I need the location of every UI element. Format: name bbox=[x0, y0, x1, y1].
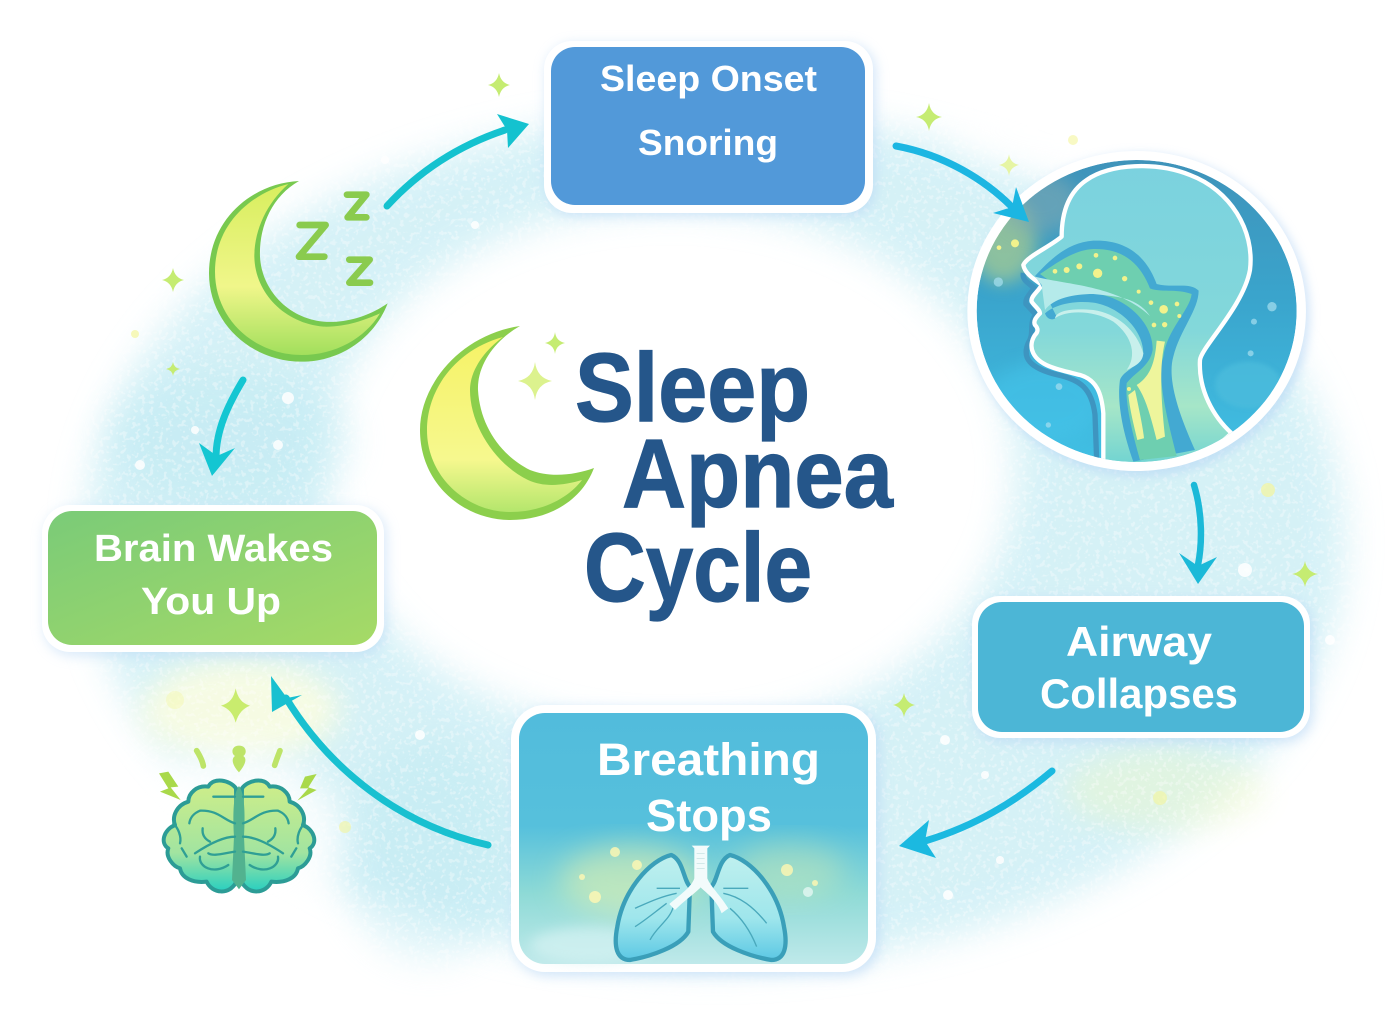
arrow: head to airway collapses bbox=[1179, 485, 1217, 584]
title block: moon and Sleep Apnea Cycle bbox=[420, 326, 894, 622]
icon: brain with alert bolts bbox=[159, 688, 317, 891]
step box: Sleep Onset / Snoring bbox=[544, 41, 876, 216]
glowing dots bbox=[997, 239, 1181, 391]
step box: Brain Wakes You Up bbox=[42, 505, 387, 656]
step box: Airway Collapses bbox=[972, 596, 1313, 742]
sparkles bbox=[162, 73, 1318, 717]
label: Breathing: Breathing bbox=[597, 734, 820, 785]
icon: crescent moon with Z letters bbox=[209, 181, 388, 362]
label: Collapses: Collapses bbox=[1040, 670, 1238, 717]
heading: Apnea: Apnea bbox=[622, 419, 894, 528]
arrow: onset to airway illustration bbox=[896, 146, 1029, 222]
arrow: collapses to breathing stops bbox=[899, 771, 1052, 858]
arrow: moon to sleep onset bbox=[387, 114, 529, 206]
label: Stops: Stops bbox=[646, 790, 772, 841]
icon: lungs bbox=[616, 846, 786, 960]
label: Airway: Airway bbox=[1066, 618, 1213, 665]
arrow: breathing stops to brain bbox=[271, 676, 488, 845]
arrow: moon to brain wakes box bbox=[199, 380, 243, 476]
illustration: head profile airway bbox=[967, 151, 1310, 477]
label: Snoring: Snoring bbox=[638, 122, 778, 163]
Z letters bbox=[299, 195, 370, 283]
label: Brain Wakes: Brain Wakes bbox=[94, 528, 333, 570]
airway passages bbox=[1035, 241, 1199, 462]
icon: title crescent moon bbox=[420, 326, 594, 520]
heading: Cycle: Cycle bbox=[584, 513, 812, 622]
step box: Breathing Stops bbox=[511, 705, 880, 976]
label: You Up: You Up bbox=[141, 581, 281, 623]
label: Sleep Onset: Sleep Onset bbox=[600, 58, 817, 99]
heading: Sleep: Sleep bbox=[575, 333, 810, 442]
